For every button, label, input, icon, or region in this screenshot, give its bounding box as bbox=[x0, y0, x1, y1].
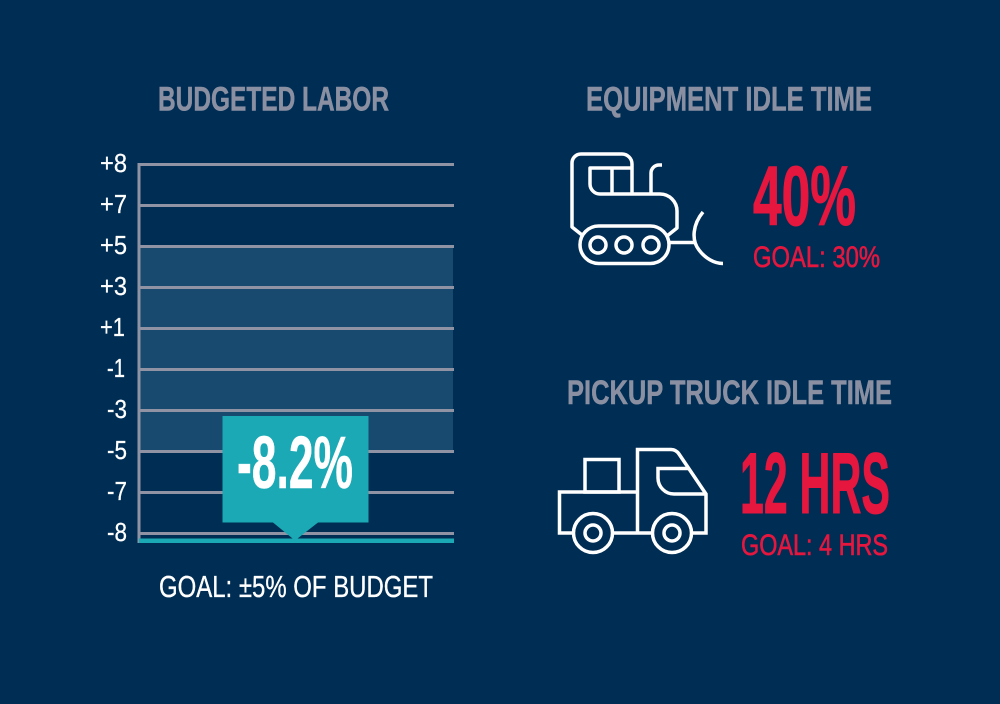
goal range band bbox=[139, 246, 453, 452]
panel: budgeted labor chart bbox=[100, 150, 454, 547]
y-axis labels: -7 bbox=[107, 478, 127, 506]
y-axis labels: -3 bbox=[107, 396, 127, 424]
callout: -8.2%: -8.2% bbox=[237, 421, 353, 504]
stat: 40%: 40% bbox=[753, 149, 856, 243]
y-axis labels: +7 bbox=[100, 191, 127, 219]
goal text: 30%: GOAL: 30% bbox=[753, 241, 880, 274]
goal text: 4 hrs: GOAL: 4 HRS bbox=[741, 529, 888, 562]
y-axis labels: -8 bbox=[107, 519, 127, 547]
heading: pickup truck idle time: PICKUP TRUCK IDLE TIME bbox=[567, 374, 892, 412]
y-axis labels: -1 bbox=[107, 355, 125, 383]
icon: pickup truck bbox=[560, 450, 706, 552]
y-axis labels: +5 bbox=[100, 232, 127, 260]
actual value line bbox=[139, 538, 454, 543]
y-axis labels: -5 bbox=[107, 437, 127, 465]
y-axis labels: +3 bbox=[100, 273, 127, 301]
heading: equipment idle time: EQUIPMENT IDLE TIME bbox=[586, 80, 872, 118]
y-axis labels bbox=[100, 150, 127, 547]
icon: bulldozer bbox=[572, 154, 723, 264]
y-axis labels: +8 bbox=[100, 150, 127, 178]
goal text: budget: GOAL: ±5% OF BUDGET bbox=[159, 570, 433, 604]
y-axis labels: +1 bbox=[100, 314, 125, 342]
heading: budgeted labor: BUDGETED LABOR bbox=[158, 80, 389, 118]
callout: -8.2% bbox=[222, 416, 368, 540]
